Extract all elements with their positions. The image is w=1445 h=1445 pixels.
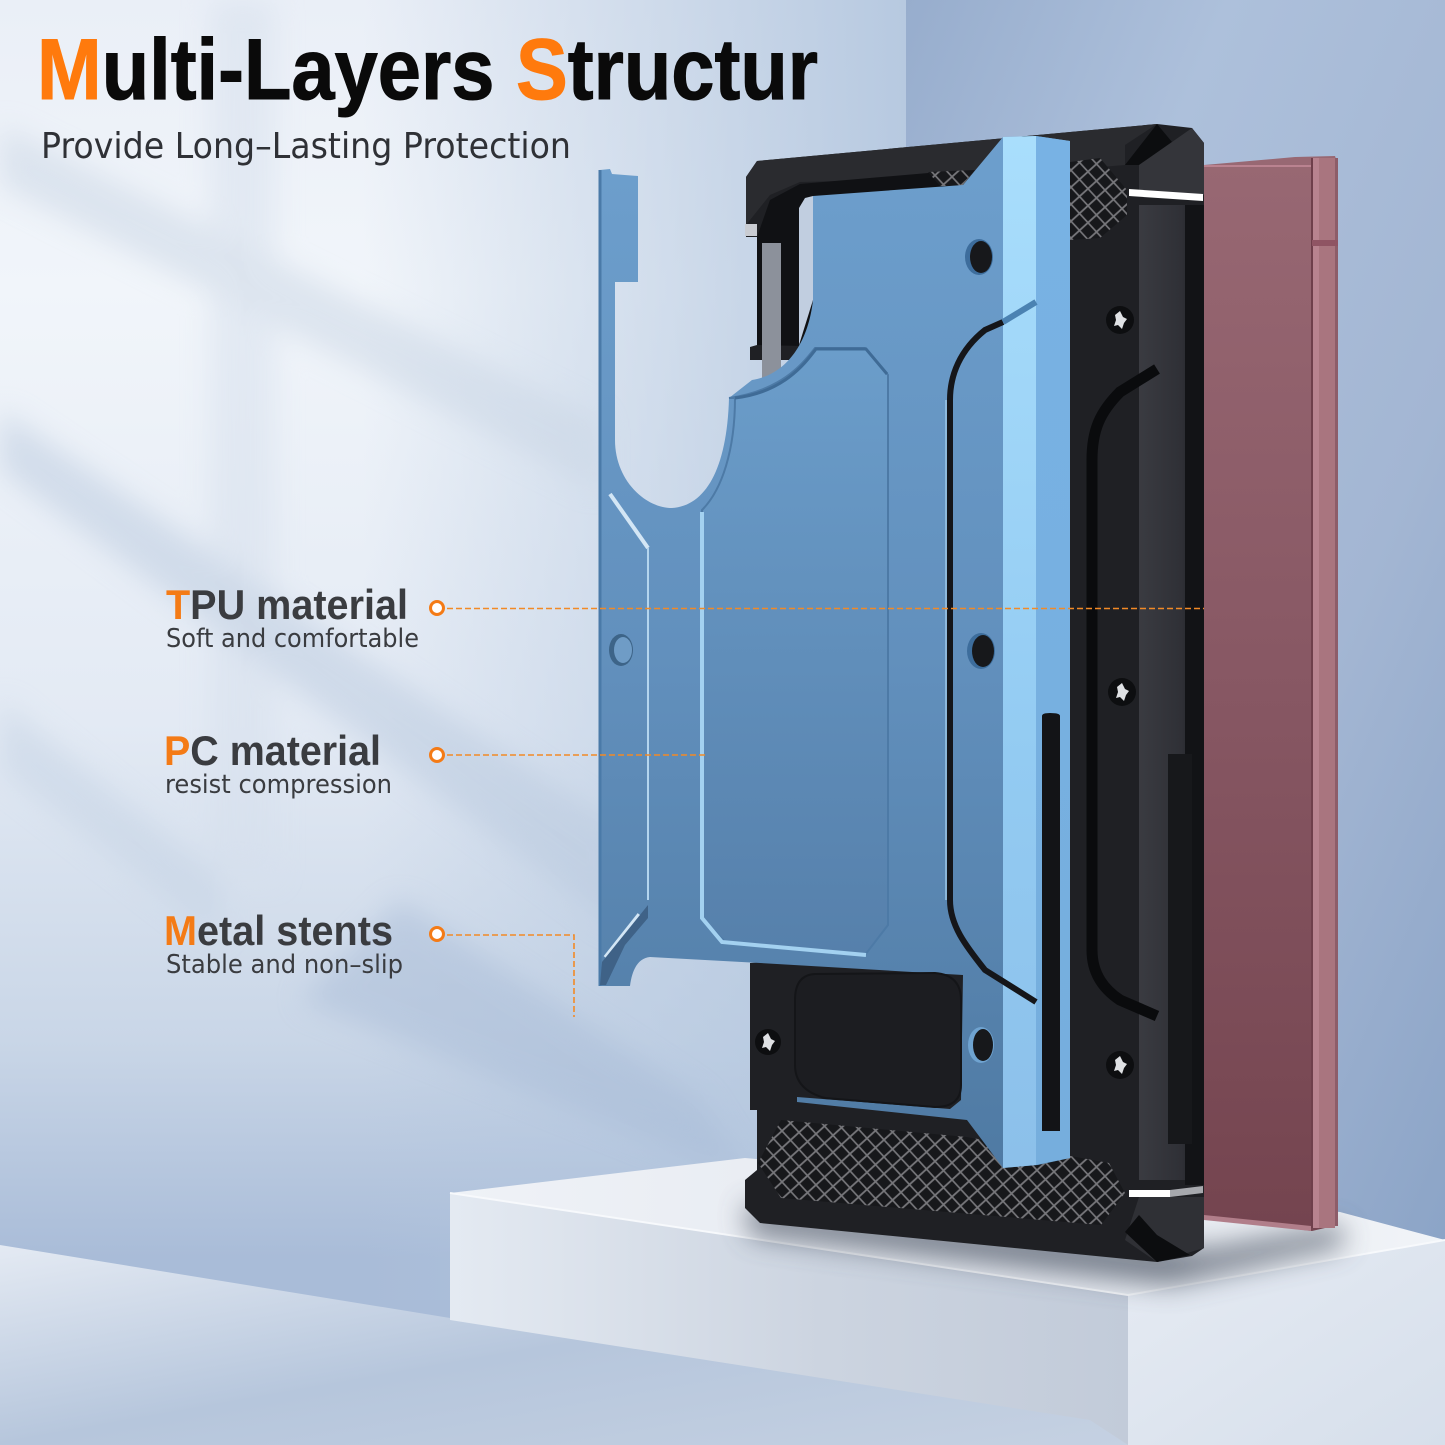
subtitle: Provide Long–Lasting Protection (41, 126, 571, 167)
slot (1042, 713, 1060, 1131)
callout: Metal stents (164, 907, 403, 980)
raised panel (702, 348, 888, 955)
callout: TPU material: Soft and comfortable (166, 624, 419, 654)
callout: PC material: resist compression (165, 770, 392, 800)
hole (609, 634, 633, 666)
screw (1108, 678, 1136, 706)
callout: TPU material: TPU material (166, 581, 408, 628)
hole (967, 633, 995, 669)
callout: Metal stents: Stable and non–slip (166, 950, 403, 980)
screw (1106, 1051, 1134, 1079)
phone (1204, 156, 1338, 1231)
callout: PC material (164, 727, 392, 800)
black armor case (745, 124, 1204, 1262)
connector: TPU material (430, 602, 1204, 614)
title: Multi-Layers Structur (37, 22, 818, 118)
upper mesh sliver (928, 170, 975, 186)
silver bands (1129, 189, 1203, 201)
callout: TPU material (166, 581, 419, 654)
hole (968, 1027, 994, 1063)
left rail highlight (610, 494, 648, 548)
callout: PC material: PC material (164, 727, 381, 774)
arc recess (950, 322, 1036, 1002)
connector: Metal stents (430, 928, 574, 1017)
right grip arc (1092, 369, 1157, 1016)
blue metal stent (600, 136, 1070, 1168)
screw (1106, 306, 1134, 334)
top mesh (1070, 158, 1127, 240)
callout: Metal stents: Metal stents (164, 907, 393, 954)
screw (755, 1029, 781, 1055)
contact shadow (745, 1205, 1345, 1285)
holes (965, 239, 993, 275)
bottom mesh (758, 1120, 1125, 1225)
floor (0, 1245, 1130, 1445)
camera window (795, 973, 961, 1107)
connector: PC material (430, 748, 705, 762)
platform (450, 1158, 1445, 1445)
